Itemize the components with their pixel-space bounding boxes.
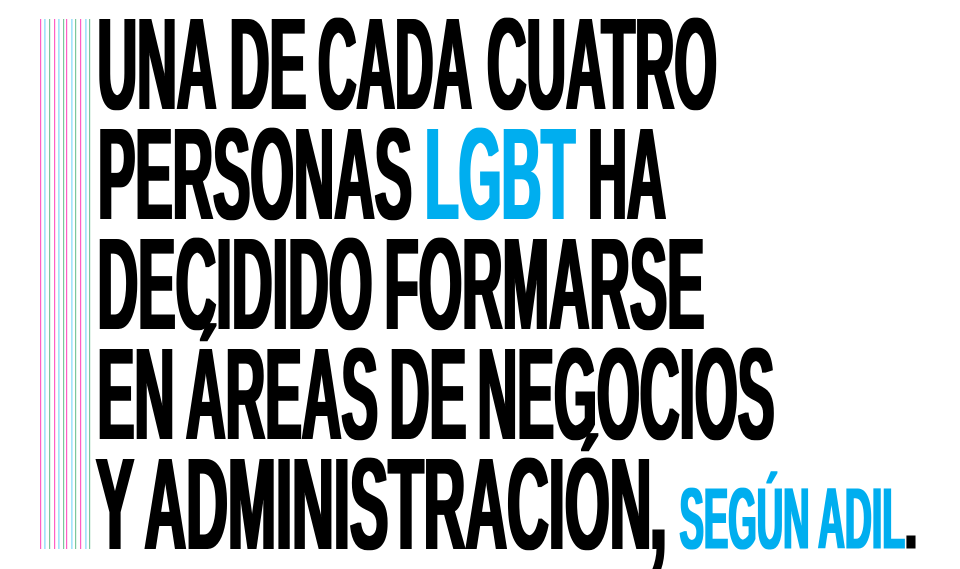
headline line 3: DECIDIDO — [98, 211, 372, 357]
headline line 4 — [98, 321, 774, 467]
headline: HA — [588, 101, 666, 247]
headline line 2: PERSONAS — [98, 101, 412, 247]
headline line 4: DE — [390, 321, 466, 467]
source attribution: . — [904, 470, 918, 568]
headline line 2: LGBT — [425, 101, 575, 247]
headline line 4: ÁREAS — [186, 321, 378, 467]
decorative vertical striped lines — [40, 19, 90, 549]
headline line 4: EN — [98, 321, 174, 467]
headline line 5 — [96, 431, 667, 569]
headline line 1 — [98, 0, 717, 137]
